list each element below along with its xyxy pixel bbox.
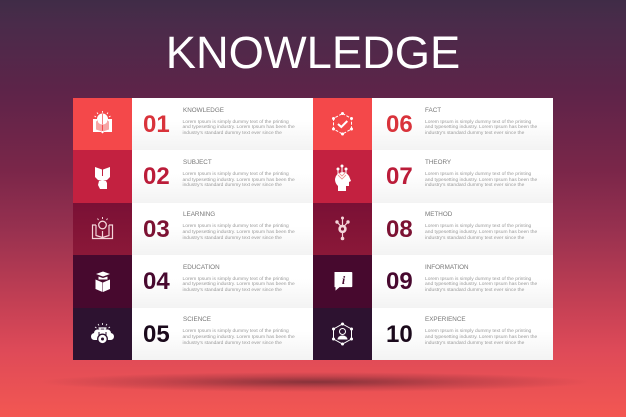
row: 09 information	[372, 255, 553, 308]
row: 08 method: and typesetting industry. Lorem Ipsum has been the	[425, 230, 537, 235]
row: 05 science: industry's standard dummy text ever since the	[182, 341, 282, 346]
row: 08 method	[372, 203, 553, 255]
row: 08 method: METHOD	[425, 211, 452, 218]
icon tile: theory	[313, 150, 372, 203]
row: 05 science: Lorem Ipsum is simply dummy text of the printing	[182, 329, 289, 334]
title: KNOWLEDGE	[166, 26, 460, 78]
row: 05 science: and typesetting industry. Lorem Ipsum has been the	[182, 335, 295, 340]
row: 10 experience: and typesetting industry. Lorem Ipsum has been the	[425, 335, 537, 340]
row: 06 fact: and typesetting industry. Lorem Ipsum has been the	[425, 125, 537, 130]
row: 03 learning: LEARNING	[183, 211, 215, 218]
row: 07 theory: and typesetting industry. Lorem Ipsum has been the	[425, 178, 537, 183]
row: 06 fact: 06	[386, 111, 413, 138]
icon tile: science	[73, 308, 132, 360]
row: 09 information: and typesetting industry. Lorem Ipsum has been the	[425, 282, 537, 287]
row: 08 method: 08	[386, 216, 413, 243]
row: 03 learning: and typesetting industry. Lorem Ipsum has been the	[182, 230, 295, 235]
row: 07 theory: industry's standard dummy text ever since the	[425, 183, 524, 188]
row: 10 experience	[372, 308, 553, 360]
row: 01 knowledge: Lorem Ipsum is simply dummy text of the printing	[182, 120, 289, 124]
row: 03 learning: industry's standard dummy text ever since the	[182, 236, 282, 241]
row: 03 learning	[132, 203, 313, 255]
floor shadow	[40, 372, 590, 392]
row: 04 education: industry's standard dummy text ever since the	[182, 288, 282, 293]
icon tile: education	[73, 255, 132, 308]
row: 10 experience: 10	[386, 321, 413, 348]
row: 07 theory: Lorem Ipsum is simply dummy text of the printing	[425, 172, 531, 177]
row: 07 theory	[372, 150, 553, 203]
row: 04 education: Lorem Ipsum is simply dummy text of the printing	[182, 277, 289, 282]
row: 01 knowledge: industry's standard dummy text ever since the	[182, 131, 282, 136]
panel: left column	[73, 98, 313, 360]
row: 05 science: 05	[143, 321, 170, 348]
row: 04 education: and typesetting industry. Lorem Ipsum has been the	[182, 282, 295, 287]
row: 04 education	[132, 255, 313, 308]
row: 02 subject	[132, 150, 313, 203]
row: 09 information: industry's standard dummy text ever since the	[425, 288, 524, 293]
row: 08 method: industry's standard dummy text ever since the	[425, 236, 524, 241]
row: 01 knowledge: KNOWLEDGE	[183, 106, 224, 114]
row: 07 theory: THEORY	[425, 159, 451, 166]
row: 10 experience: Lorem Ipsum is simply dummy text of the printing	[425, 329, 531, 334]
panel: right column	[313, 98, 553, 360]
row: 01 knowledge: and typesetting industry. Lorem Ipsum has been the	[182, 125, 295, 130]
row: 05 science: SCIENCE	[183, 316, 211, 323]
row: 03 learning: 03	[143, 216, 170, 243]
row: 09 information: Lorem Ipsum is simply dummy text of the printing	[425, 277, 531, 282]
icon tile: subject	[73, 150, 132, 203]
row: 06 fact	[372, 98, 553, 150]
icon tile: knowledge	[73, 98, 132, 150]
row: 03 learning: Lorem Ipsum is simply dummy text of the printing	[182, 224, 289, 229]
row: 06 fact: industry's standard dummy text ever since the	[425, 131, 524, 136]
row: 06 fact: FACT	[425, 106, 441, 114]
row: 08 method: Lorem Ipsum is simply dummy text of the printing	[425, 224, 531, 229]
row: 09 information: INFORMATION	[425, 264, 469, 271]
row: 01 knowledge	[132, 98, 313, 150]
row: 02 subject: industry's standard dummy text ever since the	[182, 183, 282, 188]
row: 01 knowledge: 01	[143, 111, 170, 138]
row: 04 education: 04	[143, 268, 170, 295]
row: 07 theory: 07	[386, 163, 413, 190]
row: 02 subject: SUBJECT	[183, 159, 212, 166]
row: 10 experience: industry's standard dummy text ever since the	[425, 341, 524, 346]
icon tile: information: i	[342, 273, 346, 287]
row: 04 education: EDUCATION	[183, 264, 220, 271]
icon tile: fact	[313, 98, 372, 150]
row: 05 science	[132, 308, 313, 360]
row: 10 experience: EXPERIENCE	[425, 316, 466, 323]
row: 02 subject: and typesetting industry. Lorem Ipsum has been the	[182, 178, 295, 183]
row: 02 subject: 02	[143, 163, 170, 190]
row: 06 fact: Lorem Ipsum is simply dummy text of the printing	[425, 120, 531, 124]
icon tile: experience	[313, 308, 372, 360]
icon tile: method	[313, 203, 372, 255]
row: 09 information: 09	[386, 268, 413, 295]
icon tile: learning	[73, 203, 132, 255]
row: 02 subject: Lorem Ipsum is simply dummy text of the printing	[182, 172, 289, 177]
icon tile: information	[313, 255, 372, 308]
